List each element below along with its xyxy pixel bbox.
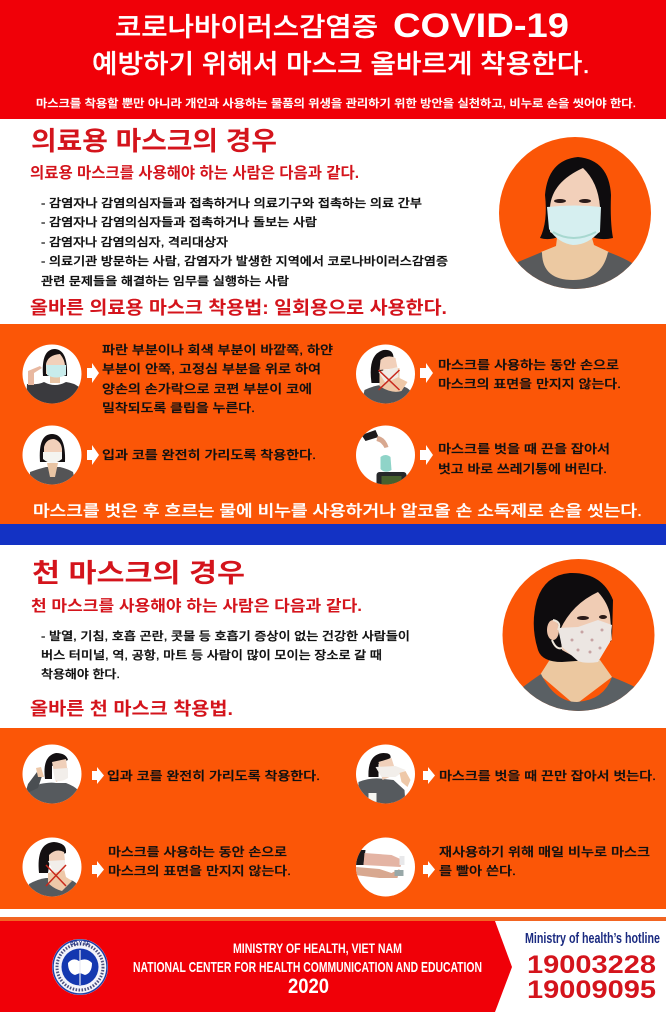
step 3 text [108, 845, 291, 878]
portrait: woman with medical mask [499, 137, 651, 289]
organisation name: 2020 [288, 975, 329, 998]
step 1 text: 부분이 안쪽, 고정심 부분을 위로 하여 [102, 362, 321, 376]
step 2 icon [356, 344, 415, 404]
step 3 text: 마스크를 사용하는 동안 손으로 [108, 845, 287, 859]
header note: 마스크를 착용할 뿐만 아니라 개인과 사용하는 물품의 위생을 관리하기 위한 방안을 실천하고, 비누로 손을 씻어야 한다. [36, 96, 636, 110]
step 1 text [102, 343, 333, 415]
step 1 arrow [87, 363, 99, 383]
heading: medical mask: 의료용 마스크의 경우 [31, 126, 277, 156]
title line 2: 예방하기 위해서 마스크 올바르게 착용한다. [92, 49, 590, 79]
heading: correct cloth mask use: 올바른 천 마스크 착용법. [30, 699, 233, 719]
footer stripe [0, 917, 666, 921]
step 1 text: 양손의 손가락으로 코편 부분이 코에 [102, 382, 312, 396]
heading: cloth mask: 천 마스크의 경우 [32, 558, 245, 588]
hotline: 19009095 [527, 976, 656, 1004]
list: medical mask users: 관련 문제들을 해결하는 임무를 실행하는 사람 [41, 274, 289, 288]
portrait: woman with cloth mask [502, 559, 654, 711]
footer banner [0, 921, 660, 1012]
step 1 text: 파란 부분이나 회색 부분이 바깥쪽, 하얀 [102, 343, 333, 357]
step 2 text: 마스크를 벗을 때 끈만 잡아서 벗는다. [439, 769, 656, 783]
step 4 text: 재사용하기 위해 매일 비누로 마스크 [439, 844, 650, 859]
subheading: who should use medical mask: 의료용 마스크를 사용해야 하는 사람은 다음과 같다. [30, 164, 359, 182]
step 4 icon [356, 426, 415, 488]
organisation name [133, 940, 482, 998]
hotline [525, 930, 660, 1004]
step 4 icon [356, 838, 415, 896]
step 3 arrow [87, 445, 99, 465]
logo: ministry of health: BỘ Y TẾ [70, 939, 91, 947]
list: medical mask users: - 의료기관 방문하는 사람, 감염자가 발생한 지역에서 코로나바이러스감염증 [41, 255, 448, 268]
step 4 text: 벗고 바로 쓰레기통에 버린다. [438, 462, 607, 476]
title line 1: 코로나바이러스감염증 [115, 12, 378, 42]
step 3 icon [22, 426, 82, 485]
step 3 text: 입과 코를 완전히 가리도록 착용한다. [102, 448, 316, 462]
list: cloth mask users [41, 629, 410, 681]
step 2 text: 마스크를 사용하는 동안 손으로 [438, 358, 619, 372]
hotline: 19003228 [527, 951, 656, 979]
step 2 text: 마스크의 표면을 만지지 않는다. [438, 377, 621, 391]
step 3 arrow [92, 861, 104, 878]
step 1 icon [22, 744, 82, 804]
step 4 text [438, 442, 610, 476]
panel: medical mask steps [0, 324, 666, 524]
step 4 text [439, 844, 650, 878]
title line 1: COVID-19 [393, 7, 569, 45]
step 3 text: 마스크의 표면을 만지지 않는다. [108, 864, 291, 878]
step 2 arrow [423, 767, 435, 784]
list: medical mask users: - 감염자나 감염의심자들과 접촉하거나 돌보는 사람 [41, 216, 317, 229]
organisation name: MINISTRY OF HEALTH, VIET NAM [233, 940, 402, 956]
step 4 text: 를 빨아 쓴다. [439, 864, 516, 878]
step 2 arrow [420, 363, 433, 383]
step 2 icon [356, 744, 415, 804]
blue divider band [0, 524, 666, 545]
step 4 text: 마스크를 벗을 때 끈을 잡아서 [438, 442, 610, 456]
list: medical mask users [41, 197, 448, 288]
list: medical mask users: - 감염자나 감염의심자들과 접촉하거나 의료기구와 접촉하는 의료 간부 [41, 197, 422, 210]
logo: ministry of health [52, 939, 108, 995]
step 4 arrow [423, 861, 435, 878]
hand washing note: 마스크를 벗은 후 흐르는 물에 비누를 사용하거나 알코올 손 소독제로 손을 씻는다. [33, 502, 642, 520]
list: cloth mask users: 착용해야 한다. [41, 668, 120, 681]
list: medical mask users: - 감염자나 감염의심자, 격리대상자 [41, 235, 228, 249]
header banner [0, 0, 666, 119]
list: cloth mask users: - 발열, 기침, 호흡 곤란, 콧물 등 호흡기 증상이 없는 건강한 사람들이 [41, 629, 410, 643]
heading: correct medical mask use: 올바른 의료용 마스크 착용법: 일회용으로 사용한다. [30, 298, 447, 318]
step 1 text: 입과 코를 완전히 가리도록 착용한다. [107, 769, 320, 783]
organisation name: NATIONAL CENTER FOR HEALTH COMMUNICATION AND EDUCATION [133, 959, 482, 976]
step 1 arrow [92, 767, 104, 784]
panel: cloth mask steps [0, 728, 666, 909]
step 1 text: 밀착되도록 클립을 누른다. [102, 401, 255, 415]
list: cloth mask users: 버스 터미널, 역, 공항, 마트 등 사람이 많이 모이는 장소로 갈 때 [41, 648, 382, 662]
title line 1 [115, 7, 569, 45]
step 3 icon [22, 838, 82, 897]
step 1 icon [22, 344, 82, 404]
step 2 text [438, 358, 621, 391]
step 4 arrow [420, 445, 433, 465]
subheading: who should use cloth mask: 천 마스크를 사용해야 하는 사람은 다음과 같다. [31, 597, 362, 615]
